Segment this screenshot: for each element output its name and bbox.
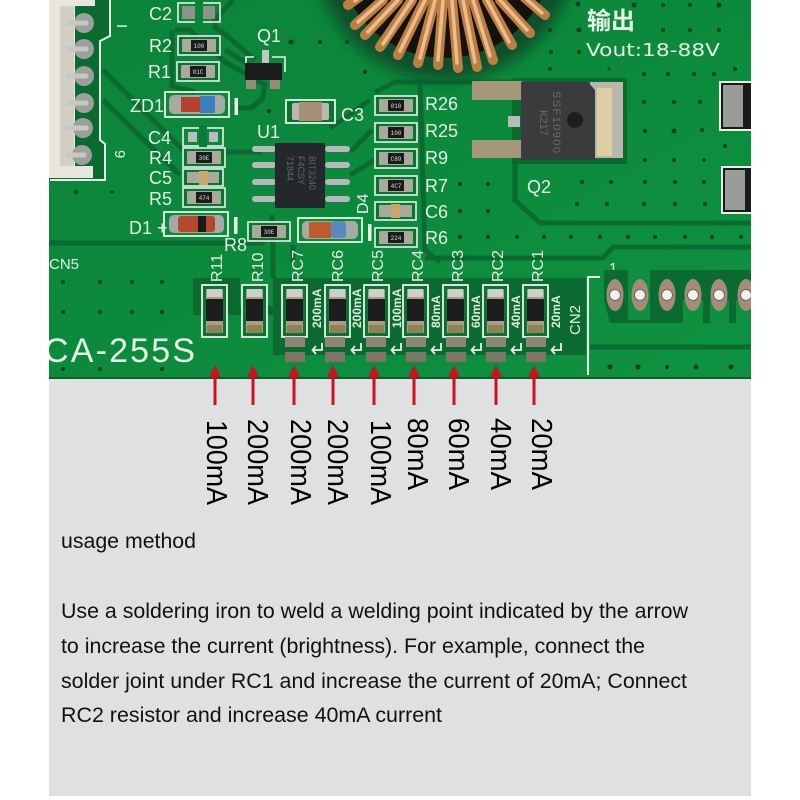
- silkscreen labels: RC7: [290, 250, 307, 282]
- silkscreen labels: R26: [425, 94, 458, 114]
- silkscreen labels: 9: [111, 150, 128, 158]
- output voltage label: [586, 8, 721, 61]
- circuit board photo: [44, 0, 762, 379]
- small SMD parts: 01C: [193, 69, 204, 76]
- arrow: RC1: [528, 365, 540, 405]
- IC U1: BIT3240: [307, 156, 317, 190]
- silkscreen labels: CN2: [567, 305, 584, 335]
- connector socket and pins: [49, 0, 111, 181]
- diode ZD1: [165, 92, 238, 117]
- silkscreen labels: R10: [250, 253, 267, 282]
- toroid inductor coil: [315, 0, 575, 80]
- arrow: RC3: [448, 365, 460, 405]
- current labels: 200mA: [321, 419, 353, 506]
- instructions text: Use a soldering iron to weld a welding point indicated by the arrow: [61, 600, 689, 623]
- silkscreen current values: 200mA: [310, 288, 324, 328]
- silkscreen labels: R6: [425, 228, 448, 248]
- small SMD parts: 010: [391, 103, 402, 110]
- IC U1: 71844: [285, 156, 295, 181]
- silkscreen current values: [310, 288, 563, 354]
- current setting resistors: [202, 285, 548, 362]
- small SMD parts: 30E: [199, 155, 210, 162]
- silkscreen labels: R25: [425, 121, 458, 141]
- small SMD parts: 224: [391, 235, 402, 242]
- current labels: 40mA: [484, 418, 516, 491]
- silkscreen labels: R7: [425, 176, 448, 196]
- small SMD parts: 4C7: [391, 183, 402, 190]
- current labels: 200mA: [241, 419, 273, 506]
- small SMD parts: 100: [194, 43, 205, 50]
- silkscreen labels: RC5: [370, 250, 387, 282]
- MOSFET Q2: [472, 78, 627, 164]
- via holes: [61, 2, 743, 371]
- dark ground plane behind resistor row: [193, 278, 586, 355]
- right terminal pads: [719, 81, 751, 214]
- silkscreen current values: 80mA: [429, 295, 443, 328]
- model number: CA-255S: [44, 332, 195, 370]
- silkscreen current values: 100mA: [390, 288, 404, 328]
- silkscreen labels: CN5: [49, 256, 79, 273]
- silkscreen labels: C3: [341, 105, 364, 125]
- dark copper traces: [49, 0, 751, 347]
- arrow: RC2: [490, 365, 502, 405]
- silkscreen current values: 40mA: [509, 295, 523, 328]
- silkscreen labels: R5: [149, 189, 172, 209]
- arrow: R10: [247, 365, 259, 405]
- small SMD parts: 30E: [264, 229, 275, 236]
- small SMD parts: C89: [391, 156, 402, 163]
- instructions text: solder joint under RC1 and increase the current of 20mA; Connect: [61, 670, 687, 693]
- silkscreen labels: I: [113, 24, 130, 28]
- current labels: 20mA: [525, 418, 557, 491]
- silkscreen labels: C5: [149, 168, 172, 188]
- silkscreen labels: D1 +: [129, 218, 168, 238]
- current labels: 100mA: [200, 420, 232, 506]
- diode D1: [164, 212, 238, 236]
- silkscreen labels: RC4: [410, 250, 427, 282]
- silkscreen labels: R11: [209, 254, 226, 282]
- current labels: [200, 418, 557, 506]
- current labels: 80mA: [401, 418, 433, 491]
- small SMD parts: [177, 0, 417, 247]
- silkscreen labels: R9: [425, 148, 448, 168]
- silkscreen current values: 200mA: [350, 288, 364, 328]
- silkscreen labels: C4: [148, 128, 171, 148]
- silkscreen labels: RC6: [330, 250, 347, 282]
- small SMD parts: 100: [391, 130, 402, 137]
- instructions text: [61, 600, 689, 727]
- silkscreen labels: R1: [148, 62, 171, 82]
- IC U1: F4CSY: [296, 156, 306, 185]
- silkscreen labels: [49, 4, 617, 335]
- current labels: 60mA: [442, 418, 474, 491]
- silkscreen labels: U1: [257, 122, 280, 142]
- arrow: RC6: [327, 365, 339, 405]
- instructions text: RC2 resistor and increase 40mA current: [61, 704, 442, 727]
- IC U1: [252, 143, 350, 208]
- silkscreen labels: RC2: [490, 250, 507, 282]
- silkscreen labels: C2: [149, 4, 172, 24]
- silkscreen labels: Q1: [257, 26, 281, 46]
- silkscreen labels: R8: [224, 235, 247, 255]
- MOSFET Q2: K217: [537, 110, 549, 136]
- arrow: RC7: [288, 365, 300, 405]
- arrow: R11: [209, 365, 221, 405]
- red arrows: [209, 365, 540, 405]
- grey panel background: [49, 379, 751, 796]
- silkscreen current values: 60mA: [469, 295, 483, 328]
- diode D4: [298, 218, 372, 242]
- silkscreen labels: Q2: [527, 177, 551, 197]
- silkscreen labels: ZD1: [130, 96, 164, 116]
- silkscreen labels: RC1: [530, 250, 547, 282]
- arrow: RC5: [368, 365, 380, 405]
- arrow: RC4: [408, 365, 420, 405]
- heading: usage method: usage method: [61, 530, 196, 553]
- silkscreen labels: R4: [149, 148, 172, 168]
- transistor Q1: [245, 50, 285, 89]
- current labels: 200mA: [284, 419, 316, 506]
- silkscreen current values: 20mA: [549, 295, 563, 328]
- silkscreen labels: C6: [425, 202, 448, 222]
- CN2 connector header: [588, 270, 754, 375]
- silkscreen labels: R2: [149, 36, 172, 56]
- silkscreen labels: D4: [355, 193, 372, 214]
- output voltage label: Vout:18-88V: [586, 40, 721, 61]
- instructions text: to increase the current (brightness). For example, connect the: [61, 635, 645, 658]
- silkscreen labels: 1: [609, 260, 617, 277]
- current labels: 100mA: [364, 420, 396, 506]
- output voltage label: 输出: [587, 8, 635, 35]
- MOSFET Q2: SSF10900: [550, 91, 562, 153]
- silkscreen labels: RC3: [450, 250, 467, 282]
- small SMD parts: 474: [199, 195, 210, 202]
